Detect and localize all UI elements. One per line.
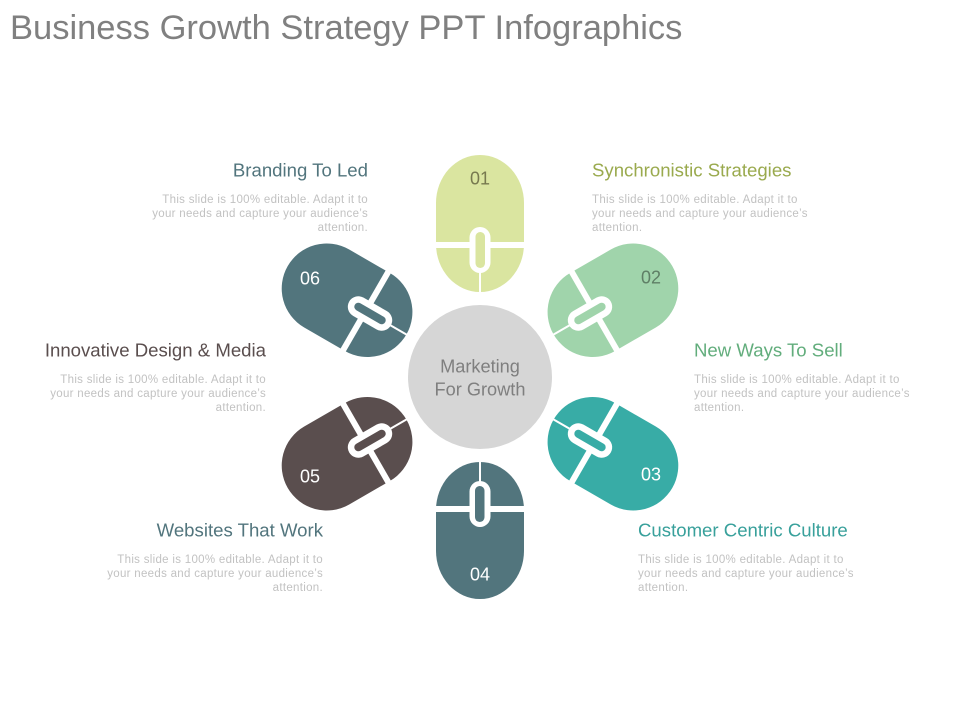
text block: Customer Centric Culture: This slide is 100% editable. Adapt it to	[638, 554, 844, 566]
text block: Synchronistic Strategies: This slide is 100% editable. Adapt it to	[592, 194, 798, 206]
text block: Branding To Led: your needs and capture your audience’s	[152, 208, 368, 220]
mouse 05	[265, 379, 431, 528]
mouse 04	[436, 460, 524, 599]
center circle: Marketing For Growth: For Growth	[435, 380, 525, 400]
mouse 02	[529, 226, 695, 375]
mouse 03: 03	[641, 464, 661, 484]
text block: Synchronistic Strategies: attention.	[592, 222, 642, 234]
text block: Websites That Work: attention.	[273, 582, 323, 594]
mouse 02: 02	[641, 268, 661, 288]
text block: New Ways To Sell: your needs and capture your audience’s	[694, 388, 910, 400]
title: Business Growth Strategy PPT Infographics	[10, 9, 682, 47]
mouse 04: 04	[470, 564, 490, 584]
text block: New Ways To Sell: attention.	[694, 402, 744, 414]
text block: Websites That Work: This slide is 100% editable. Adapt it to	[117, 554, 323, 566]
text block: Synchronistic Strategies	[592, 160, 808, 234]
text block: Customer Centric Culture	[638, 520, 854, 594]
text block: Branding To Led: Branding To Led	[233, 160, 368, 180]
text block: Innovative Design & Media: attention.	[216, 402, 266, 414]
text block: Branding To Led: attention.	[318, 222, 368, 234]
text block: Websites That Work	[107, 520, 324, 594]
text block: Innovative Design & Media: Innovative Design & Media	[45, 340, 267, 360]
text block: New Ways To Sell: This slide is 100% editable. Adapt it to	[694, 374, 900, 386]
text block: Customer Centric Culture: your needs and capture your audience’s	[638, 568, 854, 580]
mouse 03	[529, 379, 695, 528]
text block: Innovative Design & Media: This slide is 100% editable. Adapt it to	[60, 374, 266, 386]
text block: New Ways To Sell: New Ways To Sell	[694, 340, 843, 360]
text block: Innovative Design & Media	[45, 340, 267, 414]
text block: Websites That Work: Websites That Work	[157, 520, 324, 540]
text block: Innovative Design & Media: your needs and capture your audience’s	[50, 388, 266, 400]
text block: Branding To Led: This slide is 100% editable. Adapt it to	[162, 194, 368, 206]
mouse 06: 06	[300, 268, 320, 288]
text block: Websites That Work: your needs and capture your audience’s	[107, 568, 323, 580]
text block: Customer Centric Culture: attention.	[638, 582, 688, 594]
text block: Branding To Led	[152, 160, 368, 234]
text block: Customer Centric Culture: Customer Centric Culture	[638, 520, 848, 540]
text block: Synchronistic Strategies: your needs and capture your audience’s	[592, 208, 808, 220]
center circle: Marketing For Growth	[408, 305, 552, 449]
center circle: Marketing For Growth: Marketing	[440, 356, 520, 376]
mouse 05: 05	[300, 466, 320, 486]
mouse 06	[265, 226, 431, 375]
text block: Synchronistic Strategies: Synchronistic Strategies	[592, 160, 791, 180]
mouse 01: 01	[470, 168, 490, 188]
mouse 01	[436, 155, 524, 294]
text block: New Ways To Sell	[694, 340, 910, 414]
